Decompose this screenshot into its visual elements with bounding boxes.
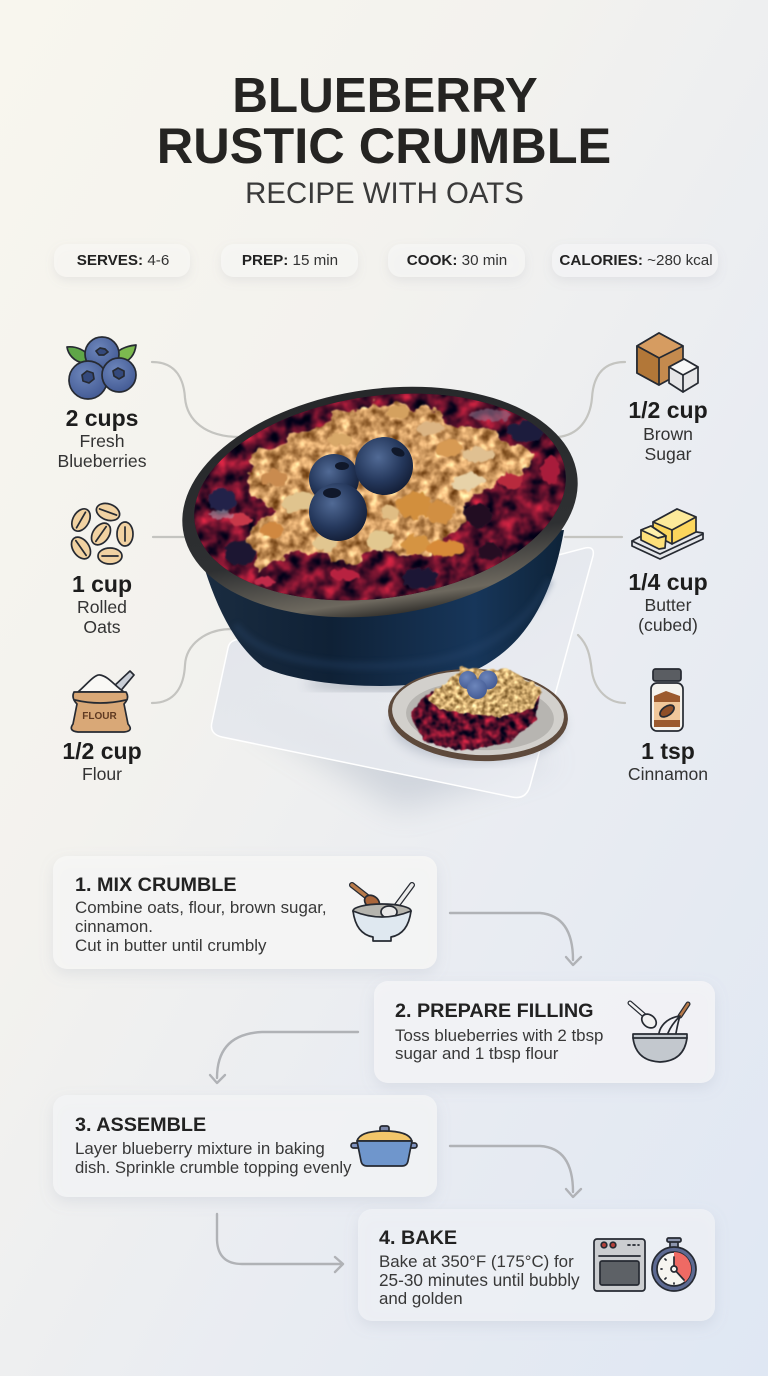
step 4 card: [358, 1209, 715, 1321]
crumble bowl photo: [182, 386, 578, 692]
crumb mound: [245, 402, 530, 570]
step 2 card: sugar and 1 tbsp flour: [395, 1044, 559, 1063]
ingredient: flour: FLOUR: [82, 711, 117, 722]
step 3 card: [53, 1095, 437, 1197]
ingredient: cinnamon: [628, 669, 708, 784]
ingredient: blueberries: Blueberries: [58, 451, 147, 471]
title: RUSTIC CRUMBLE: [157, 117, 611, 174]
step 3 card: dish. Sprinkle crumble topping evenly: [75, 1158, 352, 1177]
bowl shadow: [305, 677, 495, 691]
step 1 card: 1. MIX CRUMBLE: [75, 874, 237, 896]
ingredient: blueberries: [58, 337, 147, 471]
icon: butter on dish: [632, 509, 703, 559]
ingredient: flour: 1/2 cup: [62, 738, 142, 764]
icon: casserole dish: [351, 1126, 417, 1166]
bowl body: [205, 530, 564, 686]
arrow: step 3 to step 4 top: [450, 1146, 581, 1197]
ingredient: butter: (cubed): [638, 615, 698, 635]
ingredient: butter: Butter: [645, 595, 692, 615]
icon: bowl with whisk and spoon: [630, 1003, 688, 1062]
step 1 card: [53, 856, 437, 969]
icon: spice jar: [651, 669, 683, 731]
connector lines: [152, 362, 625, 703]
step 2 card: [374, 981, 715, 1083]
step 4 card: 25-30 minutes until bubbly: [379, 1270, 580, 1290]
step 3 card: 3. ASSEMBLE: [75, 1114, 206, 1136]
ingredient: brown sugar: Brown: [643, 424, 693, 444]
step 2 card: Toss blueberries with 2 tbsp: [395, 1026, 603, 1045]
ingredient: oats: Oats: [83, 617, 121, 637]
ingredient: butter: [628, 509, 708, 635]
pill: serves: SERVES: 4-6: [77, 252, 169, 269]
bowl rim: [167, 362, 593, 642]
pill: cook: [388, 244, 525, 277]
small plate of crumble: [386, 664, 570, 766]
ingredient: brown sugar: Sugar: [645, 444, 692, 464]
step 1 card: cinnamon.: [75, 917, 153, 936]
icon: oven: [594, 1239, 645, 1291]
ingredient: oats: Rolled: [77, 597, 127, 617]
berry filling: [194, 394, 566, 600]
step 1 card: Combine oats, flour, brown sugar,: [75, 898, 327, 917]
blueberries on top: [309, 437, 413, 541]
arrow: step 1 to step 2: [450, 913, 581, 965]
glass tray: [211, 548, 593, 810]
ingredient: cinnamon: Cinnamon: [628, 764, 708, 784]
pill: calories: [552, 244, 718, 277]
pill: serves: [54, 244, 190, 277]
title: [157, 68, 611, 174]
ingredient: brown sugar: [628, 333, 708, 464]
pill: prep: PREP: 15 min: [242, 252, 338, 269]
step 4 card: 4. BAKE: [379, 1227, 457, 1249]
icon: sugar cubes: [637, 333, 698, 392]
step 2 card: 2. PREPARE FILLING: [395, 1000, 594, 1022]
icon: blueberries: [67, 337, 136, 399]
step 1 card: Cut in butter until crumbly: [75, 936, 267, 955]
step 3 card: Layer blueberry mixture in baking: [75, 1139, 325, 1158]
subtitle: RECIPE WITH OATS: [245, 177, 524, 210]
icon: flour sack: [71, 671, 134, 732]
ingredient: flour: [62, 671, 142, 784]
ingredient: cinnamon: 1 tsp: [641, 738, 695, 764]
ingredient: blueberries: 2 cups: [66, 405, 138, 431]
step 4 card: Bake at 350°F (175°C) for: [379, 1252, 574, 1271]
title: BLUEBERRY: [232, 68, 538, 123]
ingredient: flour: Flour: [82, 764, 122, 784]
ingredient: butter: 1/4 cup: [628, 569, 708, 595]
ingredient: brown sugar: 1/2 cup: [628, 397, 708, 423]
icon: oats: [68, 500, 133, 564]
ingredient: oats: [68, 500, 133, 637]
arrow: step 3 to step 4 bottom: [217, 1214, 343, 1272]
pill: prep: [221, 244, 358, 277]
icon: mixing bowl with spoons: [352, 885, 412, 941]
pill: cook: COOK: 30 min: [407, 252, 507, 269]
dark berries and highlights: [208, 409, 559, 588]
pill: calories: CALORIES: ~280 kcal: [559, 252, 713, 269]
ingredient: blueberries: Fresh: [80, 431, 124, 451]
arrow: step 2 to step 3: [210, 1032, 358, 1083]
step 4 card: and golden: [379, 1289, 463, 1308]
ingredient: oats: 1 cup: [72, 571, 132, 597]
stats pills: [54, 244, 718, 277]
icon: stopwatch: [652, 1238, 696, 1291]
